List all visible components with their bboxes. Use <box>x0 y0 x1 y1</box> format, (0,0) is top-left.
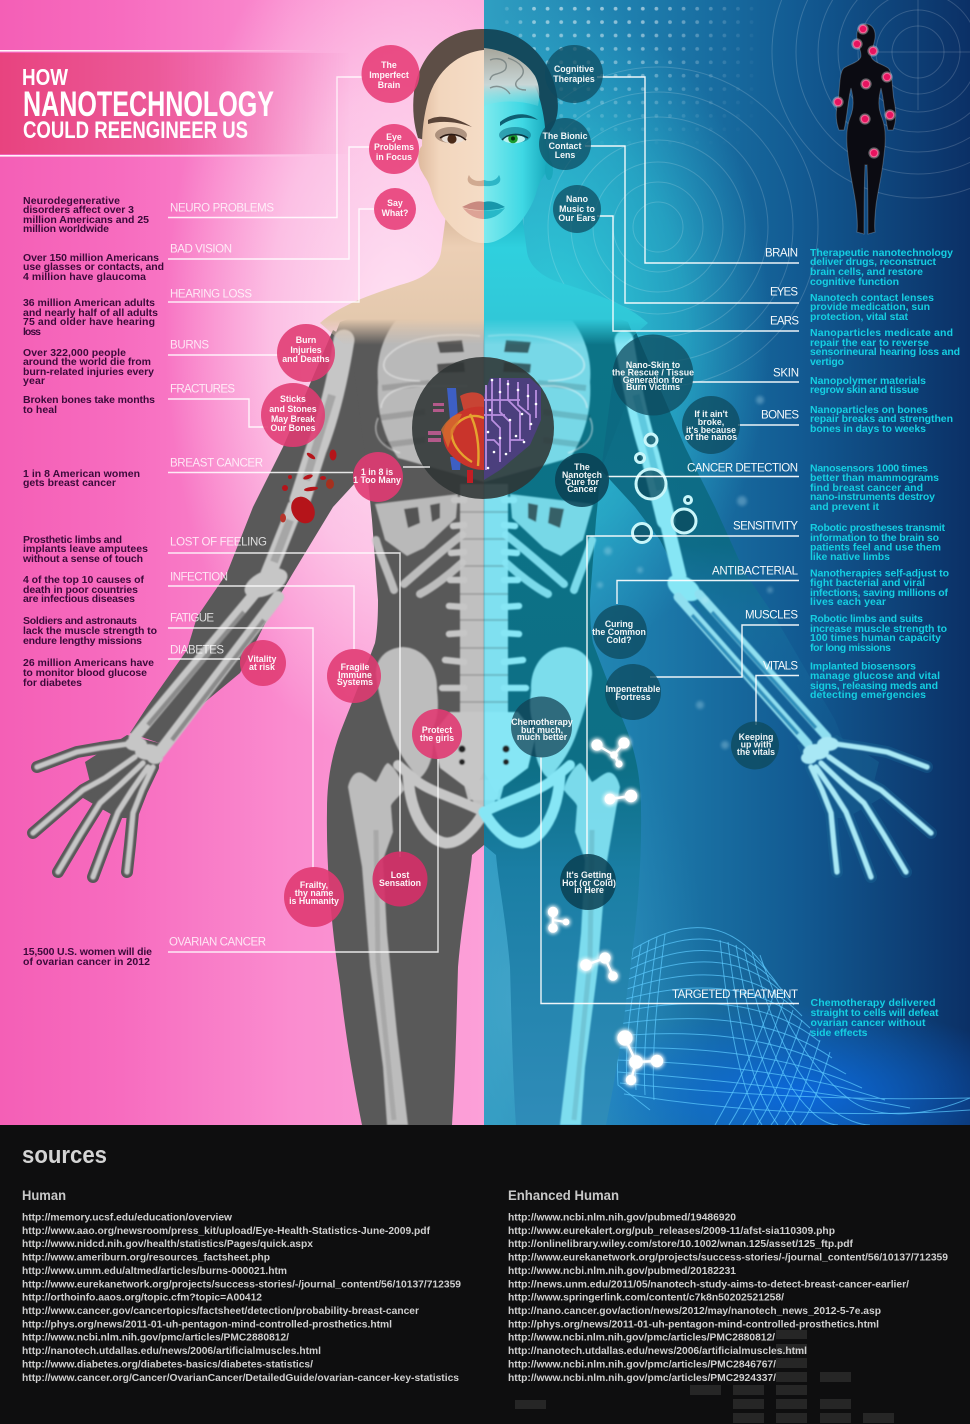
callout: The Nanotech Cure for Cancer <box>555 453 609 507</box>
enhanced side labels: EYES <box>770 286 798 298</box>
callout: If it ain't broke: it's because <box>686 425 736 435</box>
callout: Curing the Common Cold? <box>592 605 647 659</box>
stat: neuro problems: disorders affect over 3 <box>23 204 134 216</box>
callout: 1 in 8 is 1 Too Many <box>353 452 403 502</box>
description: muscles: 100 times human capacity <box>810 632 941 644</box>
callout: The Nanotech Cure for Cancer: Cure for <box>565 477 600 487</box>
stat: neuro problems: Neurodegenerative <box>23 195 120 207</box>
callout: The Imperfect Brain: The <box>381 60 397 70</box>
description: eyes: Nanotech contact lenses <box>810 292 934 304</box>
human side statistics <box>22 195 164 968</box>
stat: burns <box>23 347 154 387</box>
column: Human: http://www.nidcd.nih.gov/health/statistics/Pages/quick.aspx <box>22 1239 313 1250</box>
description: brain: deliver drugs, reconstruct <box>810 256 936 268</box>
head: enhanced half with brain <box>484 29 558 243</box>
stat: hearing loss: loss <box>23 326 41 338</box>
head: human half <box>413 29 484 243</box>
stat: fatigue <box>23 615 157 647</box>
callout: Vitality at risk <box>240 640 286 686</box>
column: Human: http://www.ncbi.nlm.nih.gov/pmc/articles/PMC2880812/ <box>22 1333 289 1344</box>
stat: breast cancer: 1 in 8 American women <box>23 468 140 480</box>
callout: Curing the Common Cold?: Cold? <box>607 635 631 645</box>
stat: lost of feeling: implants leave amputees <box>23 543 148 555</box>
blood drops on broken humerus <box>280 450 336 528</box>
callout: It's Getting Hot (or Cold) in Here <box>560 854 616 910</box>
stat: fatigue: endure lengthy missions <box>23 635 142 647</box>
human side labels: BURNS <box>170 340 209 352</box>
heading: sources: sources <box>22 1142 107 1169</box>
callout: Eye Problems in Focus: Problems <box>374 142 414 152</box>
body silhouette: human side <box>33 290 484 1125</box>
callout: 1 in 8 is 1 Too Many: 1 in 8 is <box>361 467 393 477</box>
callout: Cognitive Therapies: Therapies <box>553 74 595 84</box>
human side labels: BAD VISION <box>170 244 232 256</box>
callout: Impenetrable Fortress <box>605 664 661 720</box>
human side labels: HEARING LOSS <box>170 288 252 300</box>
human side labels: BREAST CANCER <box>170 458 263 470</box>
callout: Sticks and Stones May Break Our Bones: Our Bones <box>271 423 316 433</box>
skeleton: human side <box>33 316 484 1125</box>
column: Enhanced Human: http://www.ncbi.nlm.nih.gov/pmc/articles/PMC2880812/ <box>508 1333 775 1344</box>
stat: diabetes: 26 million Americans have <box>23 657 154 669</box>
description: bones <box>810 404 953 435</box>
callout: Chemotherapy but much, much better <box>511 696 573 758</box>
callout: Sticks and Stones May Break Our Bones: May Break <box>271 414 315 424</box>
human side labels: FATIGUE <box>170 612 214 624</box>
description: bones: Nanoparticles on bones <box>810 404 928 416</box>
stat: breast cancer: gets breast cancer <box>23 477 116 489</box>
description: sensitivity: information to the brain so <box>810 532 939 544</box>
stat: fractures: Broken bones take months <box>23 394 155 406</box>
description: brain: cognitive function <box>810 276 899 288</box>
column: Enhanced Human: http://www.eurekalert.org/pub_releases/2009-11/afst-sia110309.php <box>508 1226 835 1237</box>
stat: fatigue: Soldiers and astronauts <box>23 615 137 627</box>
callout: Nano Music to Our Ears: Nano <box>566 194 589 204</box>
right blue background <box>484 0 970 1125</box>
callout: Eye Problems in Focus <box>369 124 419 174</box>
column: Human <box>22 1187 461 1384</box>
human side labels: DIABETES <box>170 644 224 656</box>
callout: Sticks and Stones May Break Our Bones: Sticks <box>280 394 306 404</box>
description: vitals: Implanted biosensors <box>810 660 916 672</box>
icon: circuit heart half <box>484 378 541 480</box>
neck and shoulders: human skin <box>320 215 484 345</box>
enhanced side labels: EARS <box>770 316 799 328</box>
callout: Eye Problems in Focus: in Focus <box>376 152 412 162</box>
column: Human: Human <box>22 1187 66 1203</box>
glowing particles <box>597 396 773 749</box>
stat: neuro problems: million worldwide <box>23 223 109 235</box>
callout: Burn Injuries and Deaths: Injuries <box>290 345 322 355</box>
callout: Chemotherapy but much, much better: much better <box>517 732 568 742</box>
stat: ovarian cancer: 15,500 U.S. women will die <box>23 946 152 958</box>
stat: infection: death in poor countries <box>23 584 138 596</box>
callout: The Nanotech Cure for Cancer: The <box>574 462 590 472</box>
callout: The Imperfect Brain <box>362 45 420 103</box>
column: Enhanced Human: http://onlinelibrary.wiley.com/store/10.1002/wnan.125/asset/125_ftp.pdf <box>508 1239 854 1250</box>
decoration: dot matrix <box>505 6 754 142</box>
callout: Cognitive Therapies <box>545 45 603 103</box>
description: bones: bones in days to weeks <box>810 423 926 435</box>
description: cancer detection: and prevent it <box>810 501 880 513</box>
stat: diabetes <box>23 657 154 689</box>
callout: Vitality at risk: at risk <box>249 662 275 672</box>
description: skin: Nanopolymer materials <box>810 375 926 387</box>
callout: Protect the girls: Protect <box>422 725 452 735</box>
callout: Burn Injuries and Deaths <box>277 324 335 382</box>
stat: infection: are infectious diseases <box>23 593 135 605</box>
description: sensitivity: Robotic prostheses transmit <box>810 522 946 534</box>
heart disc <box>412 357 554 499</box>
enhanced side labels <box>672 248 799 1001</box>
stat: fractures: to heal <box>23 404 57 416</box>
callout: Nano-Skin: Nano-Skin to <box>626 360 681 370</box>
column: Enhanced Human: http://nano.cancer.gov/action/news/2012/may/nanotech_news_2012-5-7e.asp <box>508 1306 881 1317</box>
description: vitals <box>810 660 940 701</box>
callout: Sticks and Stones May Break Our Bones: and Stones <box>269 404 317 414</box>
enhanced side labels: ANTIBACTERIAL <box>712 566 799 578</box>
callout: The Nanotech Cure for Cancer: Nanotech <box>562 470 602 480</box>
column: Enhanced Human <box>508 1187 948 1384</box>
stat: hearing loss <box>23 297 158 338</box>
column: Human: http://www.aao.org/newsroom/press_kit/upload/Eye-Health-Statistics-June-2009.pdf <box>22 1226 431 1237</box>
description: antibacterial: Nanotherapies self-adjust to <box>810 568 949 580</box>
enhanced side labels: MUSCLES <box>745 610 798 622</box>
title banner: NANOTECHNOLOGY <box>23 85 274 124</box>
stat: ovarian cancer <box>23 946 152 968</box>
callout: If it ain't broke: of the nanos <box>685 432 737 442</box>
description: brain <box>810 247 953 288</box>
column: Enhanced Human: http://www.ncbi.nlm.nih.gov/pmc/articles/PMC2924337/ <box>508 1373 776 1384</box>
stat: burns: Over 322,000 people <box>23 347 126 359</box>
column: Human: http://www.eurekanetwork.org/projects/success-stories/-/journal_content/56/10137/712359 <box>22 1279 461 1290</box>
description: muscles <box>810 613 947 654</box>
description: muscles: increase muscle strength to <box>810 623 947 635</box>
callout: Burn Injuries and Deaths: Burn <box>296 335 316 345</box>
title banner: COULD REENGINEER US <box>23 117 248 144</box>
callout: It's Getting Hot (or Cold) in Here: Hot (or Cold) <box>562 878 616 888</box>
callout: Nano-Skin: Burn Victims <box>626 382 680 392</box>
stat: hearing loss: and nearly half of all adults <box>23 307 158 319</box>
callout: The Bionic Contact Lens <box>539 118 591 170</box>
callout: Keeping up with the vitals <box>731 722 779 770</box>
stat: bad vision: 4 million have glaucoma <box>23 271 146 283</box>
description: cancer detection: nano-instruments destroy <box>810 491 935 503</box>
small body map: silhouette with hot spots <box>834 24 896 234</box>
callout: If it ain't broke: broke, <box>698 417 724 427</box>
column: Human: http://nanotech.utdallas.edu/news/2006/artificialmuscles.html <box>22 1346 321 1357</box>
stat: lost of feeling <box>22 534 148 565</box>
description: ears: repair the ear to reverse <box>810 337 929 349</box>
description: muscles: for long missions <box>810 642 891 654</box>
callout: The Bionic Contact Lens: The Bionic <box>543 131 588 141</box>
stat: neuro problems <box>23 195 149 235</box>
column: Enhanced Human: http://www.ncbi.nlm.nih.gov/pubmed/19486920 <box>508 1212 736 1224</box>
callout: Say What?: Say <box>387 198 403 208</box>
callout: Frailty, thy name is Humanity: Frailty, <box>300 880 328 890</box>
column: Enhanced Human: http://www.eurekanetwork.org/projects/success-stories/-/journal_content/56/10137/712359 <box>508 1253 948 1264</box>
callout: Protect the girls <box>412 709 462 759</box>
description: eyes: provide medication, sun <box>810 301 930 313</box>
description: cancer detection: better than mammograms <box>810 472 939 484</box>
description: muscles: Robotic limbs and suits <box>810 613 923 625</box>
callout: The Imperfect Brain: Brain <box>378 80 400 90</box>
description: brain: brain cells, and restore <box>810 266 923 278</box>
column: Enhanced Human: http://www.ncbi.nlm.nih.gov/pubmed/20182231 <box>508 1266 736 1277</box>
description: targeted treatment: ovarian cancer without <box>810 1017 926 1029</box>
column: Human: http://www.umm.edu/altmed/articles/burns-000021.htm <box>22 1266 287 1277</box>
callout: Say What? <box>374 188 416 230</box>
callout: Nano Music to Our Ears <box>553 185 601 233</box>
callout: Say What?: What? <box>382 208 408 218</box>
enhanced side labels: TARGETED TREATMENT <box>672 989 798 1001</box>
description: ears: vertigo <box>810 356 844 368</box>
description: targeted treatment: Chemotherapy delivered <box>810 997 936 1009</box>
callout: Chemotherapy but much, much better: Chemotherapy <box>511 717 573 727</box>
callout: Fragile Immune Systems <box>327 649 381 703</box>
column: Human: http://www.cancer.org/Cancer/OvarianCancer/DetailedGuide/ovarian-cancer-key-statistics <box>22 1373 459 1384</box>
column: Enhanced Human: http://phys.org/news/2011-01-uh-pentagon-mind-controlled-prosthetics.html <box>508 1319 879 1330</box>
description: antibacterial <box>810 568 949 608</box>
description: antibacterial: lives each year <box>810 596 886 608</box>
stat: bad vision: use glasses or contacts, and <box>23 261 164 273</box>
description: antibacterial: infections, saving millions of <box>810 587 948 599</box>
callouts: human side <box>240 45 462 927</box>
callout: Impenetrable Fortress: Fortress <box>615 692 651 702</box>
callout: Lost Sensation <box>372 852 428 906</box>
description: cancer detection <box>810 462 939 513</box>
description: bones: repair breaks and strengthen <box>810 413 953 425</box>
callout: Frailty, thy name is Humanity: is Humanity <box>289 896 339 906</box>
callout: Curing the Common Cold?: the Common <box>592 627 646 637</box>
stat: burns: around the world die from <box>23 356 151 368</box>
decoration: concentric sonar rings <box>498 0 970 387</box>
connectors: enhanced side <box>541 77 799 1004</box>
sources panel <box>0 1125 970 1424</box>
callout: Nano Music to Our Ears: Music to <box>559 204 595 214</box>
column: Enhanced Human: http://nanotech.utdallas.edu/news/2006/artificialmuscles.html <box>508 1346 807 1357</box>
column: Enhanced Human: http://www.ncbi.nlm.nih.gov/pmc/articles/PMC2846767/ <box>508 1360 776 1370</box>
column: Human: http://orthoinfo.aaos.org/topic.cfm?topic=A00412 <box>22 1293 262 1304</box>
callout: Curing the Common Cold?: Curing <box>605 619 633 629</box>
stat: hearing loss: 36 million American adults <box>23 297 155 309</box>
callout: Burn Injuries and Deaths: and Deaths <box>282 354 330 364</box>
enhanced side labels: BRAIN <box>765 248 798 260</box>
callout: It's Getting Hot (or Cold) in Here: in Here <box>574 885 604 895</box>
column: Human: http://memory.ucsf.edu/education/overview <box>22 1212 232 1224</box>
human side labels: NEURO PROBLEMS <box>170 202 274 214</box>
stat: fatigue: lack the muscle strength to <box>23 625 157 637</box>
description: eyes <box>810 292 934 323</box>
human side labels: OVARIAN CANCER <box>169 936 266 948</box>
callout: Frailty, thy name is Humanity: thy name <box>295 888 333 898</box>
callout: 1 in 8 is 1 Too Many: 1 Too Many <box>353 475 401 485</box>
callout: The Imperfect Brain: Imperfect <box>369 70 409 80</box>
stat: bad vision <box>23 252 164 283</box>
stat: burns: burn-related injuries every <box>23 366 154 378</box>
column: Enhanced Human: http://news.unm.edu/2011/05/nanotech-study-aims-to-detect-breast-cancer-earlier/ <box>508 1279 909 1290</box>
description: sensitivity <box>810 522 946 563</box>
callout: Vitality at risk: Vitality <box>248 654 276 664</box>
stat: fractures <box>23 394 155 416</box>
enhanced side labels: BONES <box>761 410 799 422</box>
callout: The Nanotech Cure for Cancer: Cancer <box>567 484 597 494</box>
callout: Chemotherapy but much, much better: but much, <box>521 725 563 735</box>
column: Human: http://www.ameriburn.org/resources_factsheet.php <box>22 1253 270 1264</box>
callout: Nano Music to Our Ears: Our Ears <box>558 213 596 223</box>
neck and shoulders: enhanced skin <box>484 215 648 345</box>
callout: Keeping up with the vitals: up with <box>741 740 771 750</box>
enhanced side descriptions <box>810 247 960 1039</box>
column: Enhanced Human: Enhanced Human <box>508 1187 619 1203</box>
description: vitals: signs, releasing meds and <box>810 680 938 692</box>
callout: Fragile Immune Systems: Systems <box>337 677 373 687</box>
description: ears: Nanoparticles medicate and <box>810 327 953 339</box>
description: skin <box>810 375 926 396</box>
description: targeted treatment: side effects <box>810 1027 868 1039</box>
skeleton: enhanced side <box>484 316 931 1125</box>
stat: breast cancer <box>23 468 140 489</box>
callout: Eye Problems in Focus: Eye <box>386 132 402 142</box>
callout: Nano-Skin: Generation for <box>623 375 684 385</box>
human side labels: INFECTION <box>170 572 228 584</box>
title banner <box>0 50 350 157</box>
callout: Impenetrable Fortress: Impenetrable <box>606 684 660 694</box>
description: antibacterial: fight bacterial and viral <box>810 577 925 589</box>
enhanced side labels: CANCER DETECTION <box>687 462 798 474</box>
molecules <box>549 739 662 1084</box>
description: cancer detection: find breast cancer and <box>810 482 923 494</box>
callout: Cognitive Therapies: Cognitive <box>554 64 594 74</box>
stat: diabetes: for diabetes <box>23 677 82 689</box>
callout: Nano-Skin <box>612 334 694 416</box>
callout: Sticks and Stones May Break Our Bones <box>261 383 325 447</box>
callout: If it ain't broke <box>682 396 740 454</box>
callout: If it ain't broke: If it ain't <box>694 409 728 419</box>
stat: ovarian cancer: of ovarian cancer in 2012 <box>23 956 150 968</box>
description: sensitivity: like native limbs <box>810 551 890 563</box>
stat: infection <box>23 574 144 605</box>
stat: diabetes: to monitor blood glucose <box>23 667 147 679</box>
decoration: wave mesh <box>616 928 970 1125</box>
stat: burns: year <box>23 375 45 387</box>
callout: It's Getting Hot (or Cold) in Here: It's Getting <box>566 870 612 880</box>
enhanced side labels: SENSITIVITY <box>733 520 798 532</box>
stat: lost of feeling: Prosthetic limbs and <box>23 534 122 546</box>
stat: lost of feeling: without a sense of touch <box>22 553 143 565</box>
callout: Lost Sensation: Lost <box>391 870 409 880</box>
description: skin: regrow skin and tissue <box>810 384 919 396</box>
description: vitals: manage glucose and vital <box>810 670 940 682</box>
description: targeted treatment <box>810 997 939 1039</box>
column: Enhanced Human: http://www.springerlink.com/content/c7k8n50202521258/ <box>508 1293 784 1304</box>
title banner: HOW <box>22 64 69 90</box>
callout: The Bionic Contact Lens: Contact <box>549 141 581 151</box>
stat: bad vision: Over 150 million Americans <box>23 252 159 264</box>
callout: Nano-Skin: the Rescue / Tissue <box>612 368 694 378</box>
callout: Protect the girls: the girls <box>420 733 454 743</box>
stat: hearing loss: 75 and older have hearing <box>23 316 155 328</box>
stat: infection: 4 of the top 10 causes of <box>23 574 144 586</box>
callout: Lost Sensation: Sensation <box>379 878 421 888</box>
description: targeted treatment: straight to cells will defeat <box>810 1007 939 1019</box>
callout: Frailty, thy name is Humanity <box>284 867 344 927</box>
callouts: enhanced side <box>511 45 779 910</box>
description: cancer detection: Nanosensors 1000 times <box>810 462 928 474</box>
enhanced side labels: SKIN <box>773 368 799 380</box>
callout: Keeping up with the vitals: the vitals <box>737 747 775 757</box>
icon: anatomical heart half <box>428 388 484 483</box>
callout: Fragile Immune Systems: Fragile <box>341 662 370 672</box>
callout: Fragile Immune Systems: Immune <box>338 670 372 680</box>
stat: neuro problems: million Americans and 25 <box>23 214 149 226</box>
description: eyes: protection, vital stat <box>810 311 908 323</box>
description: brain: Therapeutic nanotechnology <box>810 247 953 259</box>
column: Human: http://phys.org/news/2011-01-uh-pentagon-mind-controlled-prosthetics.html <box>22 1319 392 1330</box>
enhanced side labels: VITALS <box>763 660 798 672</box>
description: vitals: detecting emergencies <box>810 689 926 701</box>
column: Human: http://www.cancer.gov/cancertopics/factsheet/detection/probability-breast-cancer <box>22 1306 419 1317</box>
description: ears <box>810 327 960 368</box>
connectors: human side <box>168 77 438 952</box>
column: Human: http://www.diabetes.org/diabetes-basics/diabetes-statistics/ <box>22 1360 313 1370</box>
human side labels: FRACTURES <box>170 384 235 396</box>
description: ears: sensorineural hearing loss and <box>810 346 960 358</box>
callout: The Bionic Contact Lens: Lens <box>555 150 575 160</box>
description: sensitivity: patients feel and use them <box>810 542 941 554</box>
human side labels <box>169 202 274 948</box>
callout: Keeping up with the vitals: Keeping <box>739 732 773 742</box>
nano rings on enhanced arm <box>632 434 696 542</box>
left pink background <box>0 0 484 1125</box>
human side labels: LOST OF FEELING <box>170 536 267 548</box>
body silhouette: enhanced side <box>484 290 931 1125</box>
